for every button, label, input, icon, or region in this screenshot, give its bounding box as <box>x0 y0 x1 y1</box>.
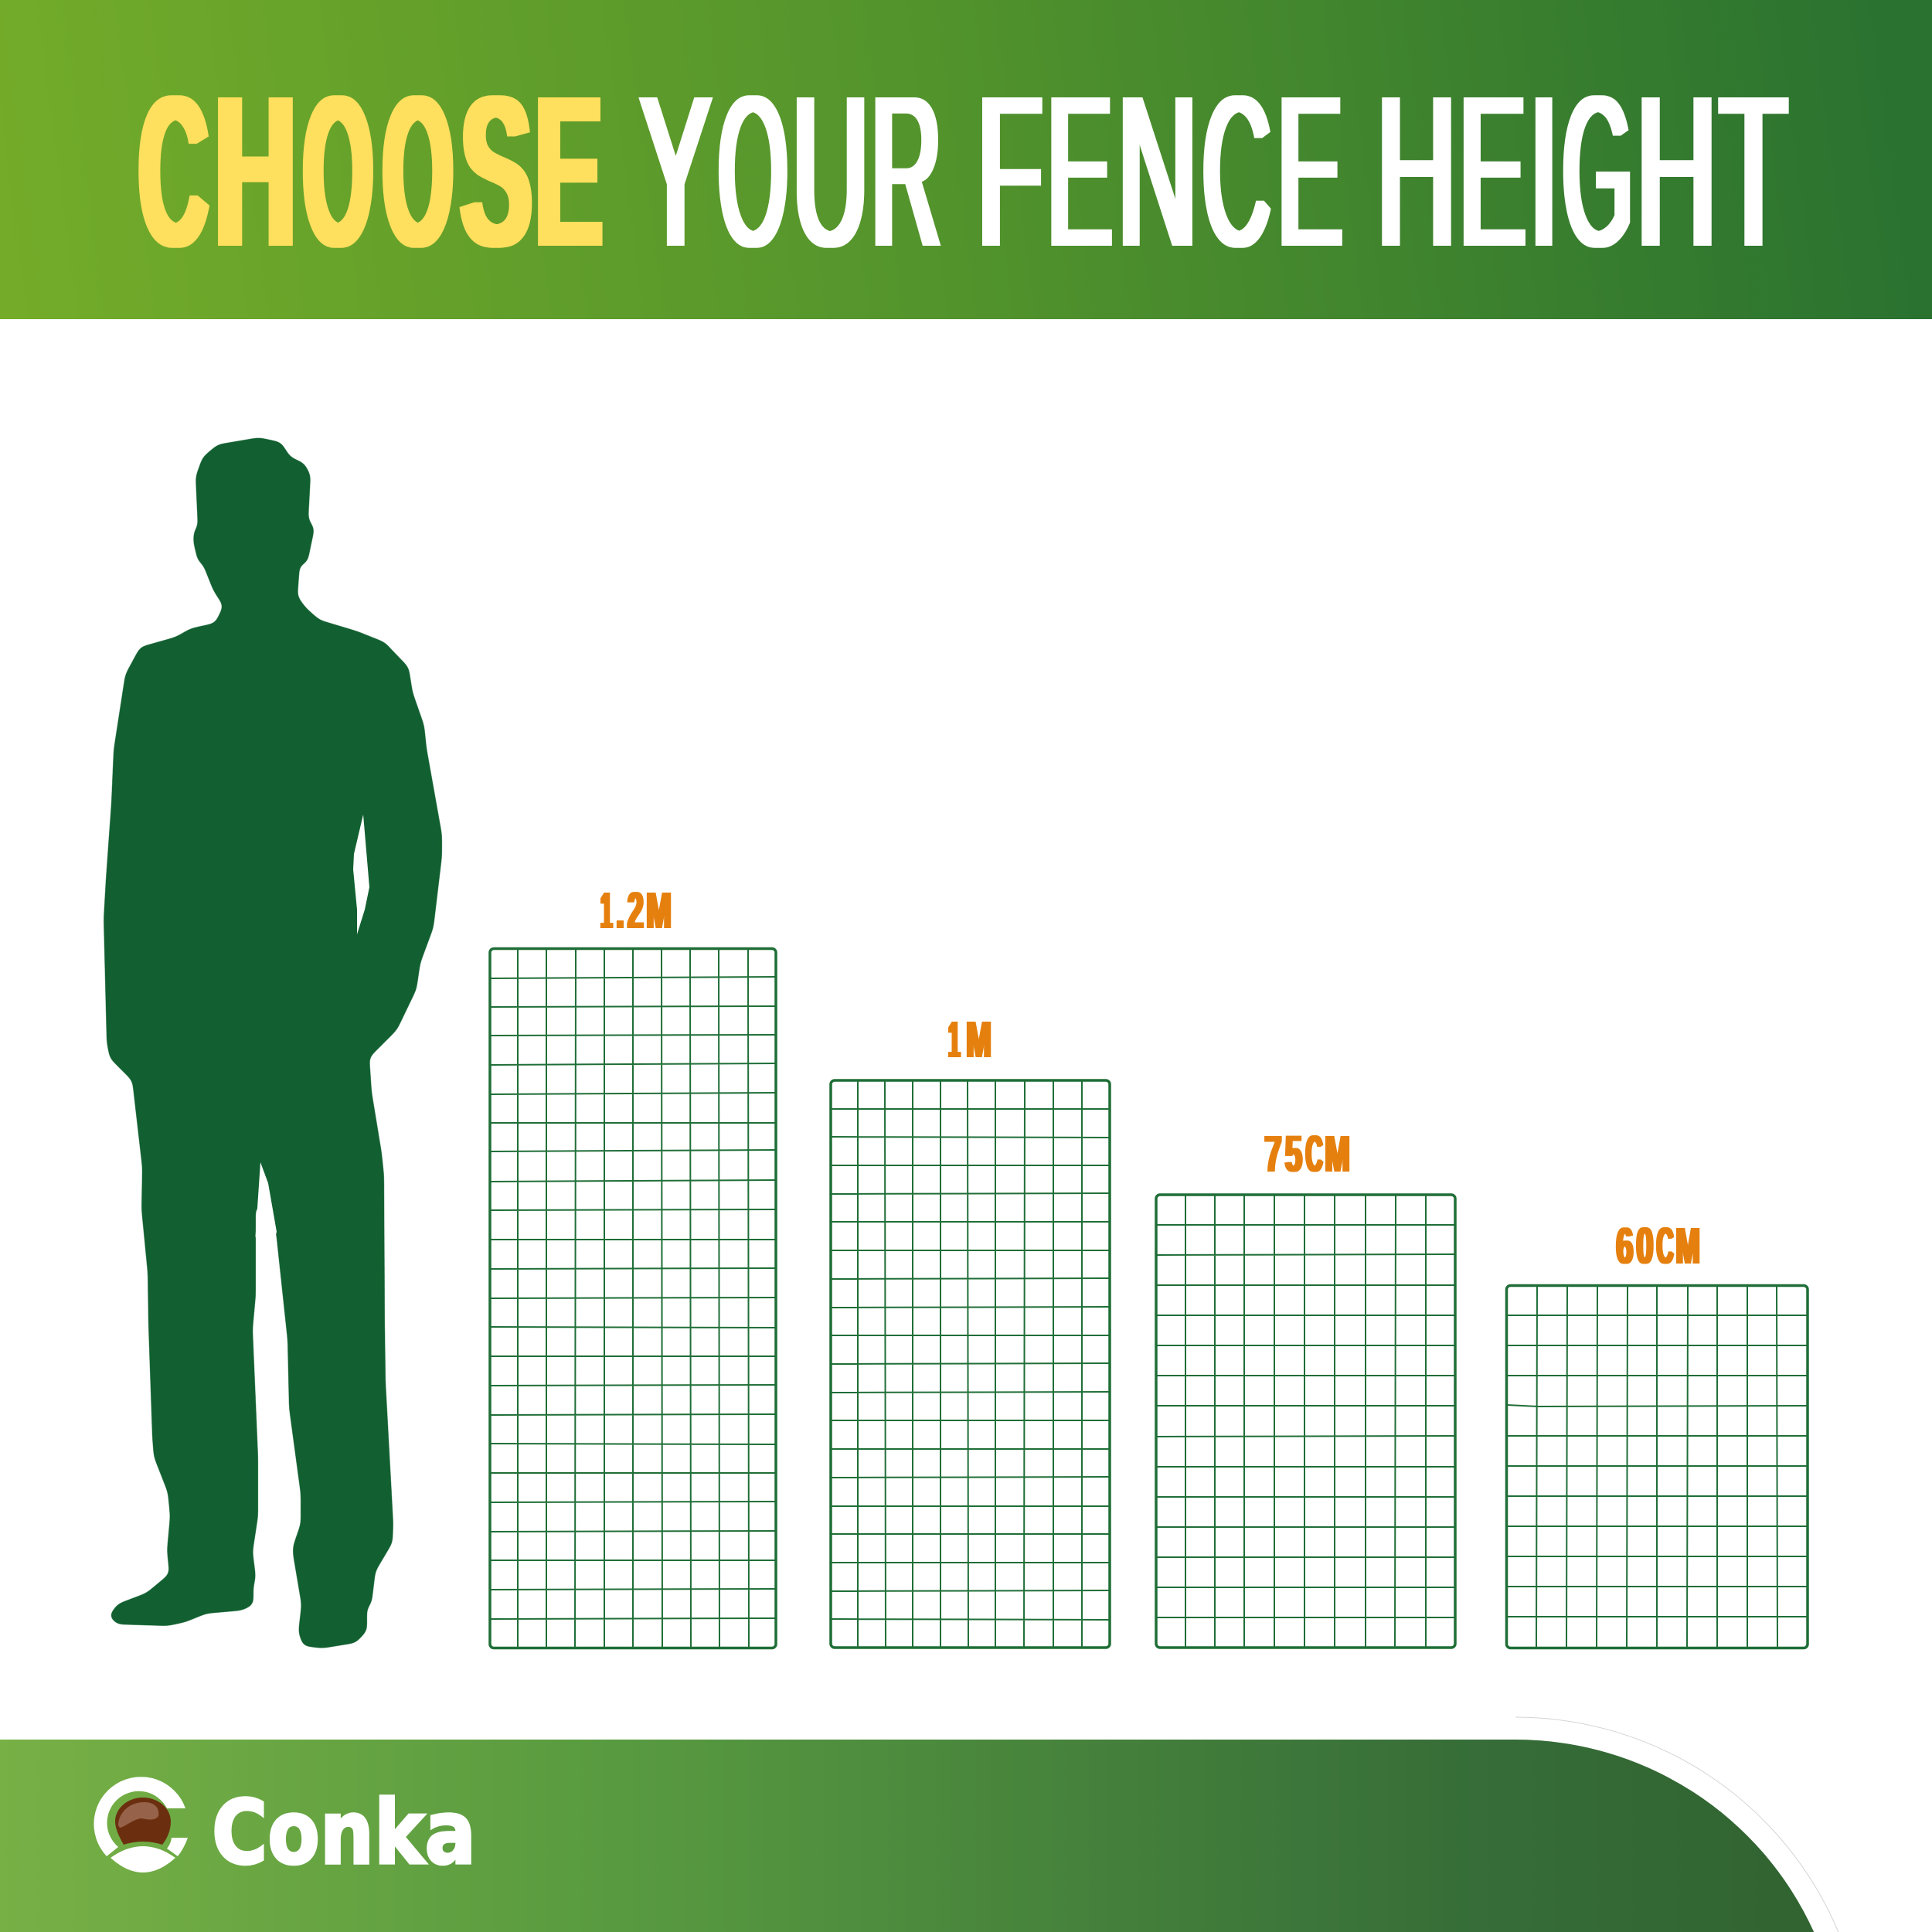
title: N <box>1117 51 1198 292</box>
title: E <box>1459 51 1526 292</box>
header banner <box>0 0 1932 319</box>
title: H <box>214 51 297 292</box>
title: C <box>138 51 209 292</box>
title: G <box>1563 51 1633 292</box>
label: 1.2M: . <box>616 882 624 940</box>
title: E <box>535 51 603 292</box>
label: 1.2M: M <box>646 882 672 940</box>
grid: 60CM <box>1507 1286 1808 1648</box>
label: 1.2M: 2 <box>628 882 644 940</box>
grid: 75CM <box>1156 1195 1455 1648</box>
title: T <box>1719 51 1787 292</box>
title: Y <box>640 51 712 292</box>
grid: 1M <box>831 1080 1110 1648</box>
title: F <box>978 51 1043 292</box>
icon: chestnut in C ring <box>94 1777 188 1872</box>
label: 75CM: C <box>1306 1125 1322 1183</box>
title: E <box>1047 51 1112 292</box>
title: U <box>792 51 869 292</box>
silhouette of standing man <box>104 438 441 1648</box>
title: S <box>461 51 532 292</box>
title: R <box>871 51 941 292</box>
label: 75CM: M <box>1325 1125 1350 1183</box>
title <box>138 51 1787 292</box>
logo: Conka <box>94 1777 476 1884</box>
fence panel: 1.2M <box>490 882 776 1648</box>
fence panel: 75CM <box>1156 1125 1455 1648</box>
label: 1M: 1 <box>948 1011 960 1069</box>
title: O <box>718 51 787 292</box>
label: 60CM: 6 <box>1616 1217 1633 1275</box>
title: H <box>1377 51 1456 292</box>
fence panel: 60CM <box>1507 1217 1808 1648</box>
label: 1.2M: 1 <box>600 882 612 940</box>
wordmark: Conka <box>212 1781 476 1884</box>
grid: 1.2M <box>490 948 776 1648</box>
label: 60CM: C <box>1657 1217 1673 1275</box>
label: 60CM: 0 <box>1636 1217 1653 1275</box>
label: 75CM: 5 <box>1285 1125 1302 1183</box>
title: C <box>1202 51 1270 292</box>
title: O <box>303 51 373 292</box>
label: 75CM: 7 <box>1264 1125 1281 1183</box>
title: O <box>383 51 453 292</box>
title: H <box>1637 51 1717 292</box>
label: 60CM: M <box>1675 1217 1700 1275</box>
label: 1M: M <box>966 1011 992 1069</box>
title: I <box>1530 51 1557 292</box>
title: E <box>1277 51 1342 292</box>
footer banner with curved corner <box>0 1717 1838 1932</box>
fence panel: 1M <box>831 1011 1110 1648</box>
